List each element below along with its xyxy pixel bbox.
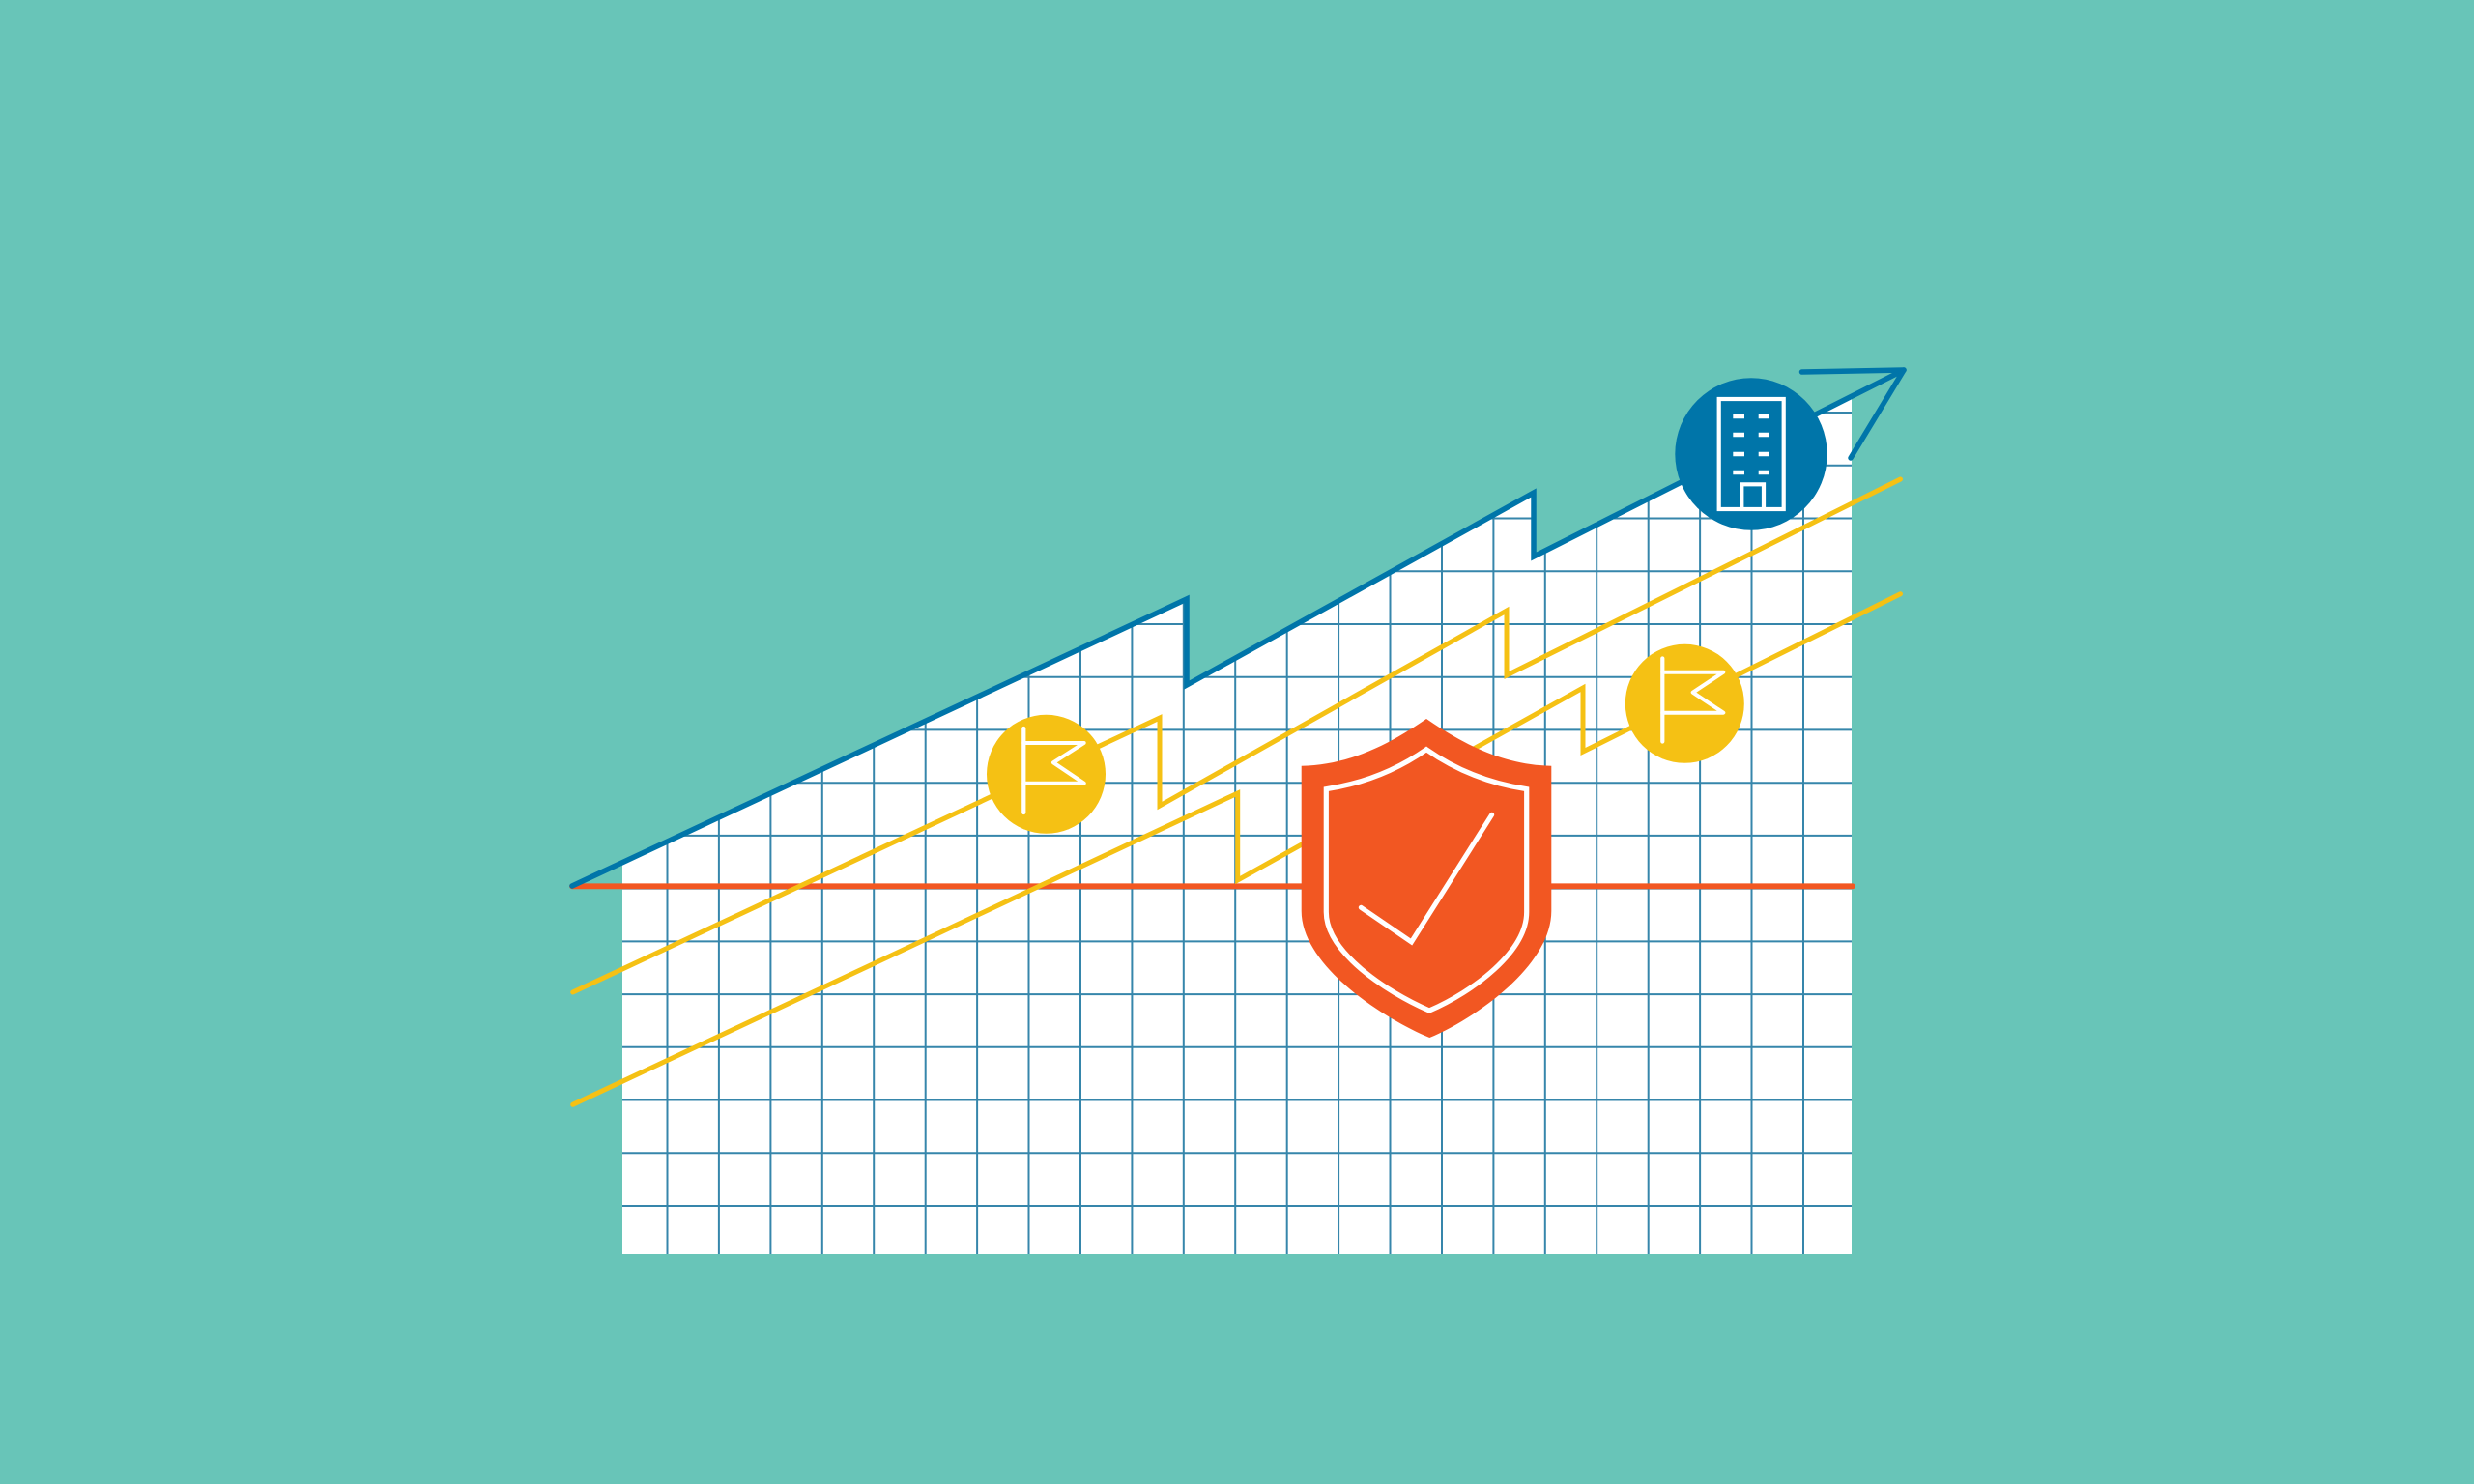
- flag pole: [1660, 659, 1664, 742]
- door: [1741, 484, 1764, 509]
- shield inner outline: [1326, 750, 1527, 1011]
- icon: building in blue circle: [1675, 378, 1827, 530]
- white chart panel: [622, 386, 1852, 1254]
- illustration: [569, 367, 1907, 1254]
- yellow circle: [987, 715, 1106, 834]
- baseline: red line: [572, 883, 1853, 889]
- building outline: [1719, 399, 1784, 509]
- flag pole: [1021, 728, 1025, 813]
- icon: flag in yellow circle, left: [987, 715, 1106, 834]
- chart grid area: [622, 386, 1852, 1254]
- upper yellow trend line: [573, 479, 1901, 992]
- icon: flag in yellow circle, right: [1625, 644, 1744, 763]
- blue circle: [1675, 378, 1827, 530]
- shield body: [1302, 719, 1551, 1038]
- grid lines: [622, 386, 1852, 1254]
- icon: shield with check mark: [1302, 719, 1551, 1038]
- flag banner: [1023, 743, 1084, 784]
- windows: [1733, 416, 1769, 472]
- lower yellow trend line: [573, 594, 1901, 1104]
- growth line: [572, 370, 1904, 886]
- arrow head: [1801, 370, 1904, 458]
- blue growth line with arrow: [572, 370, 1904, 886]
- yellow circle: [1625, 644, 1744, 763]
- check mark: [1361, 814, 1492, 942]
- flag banner: [1662, 672, 1723, 713]
